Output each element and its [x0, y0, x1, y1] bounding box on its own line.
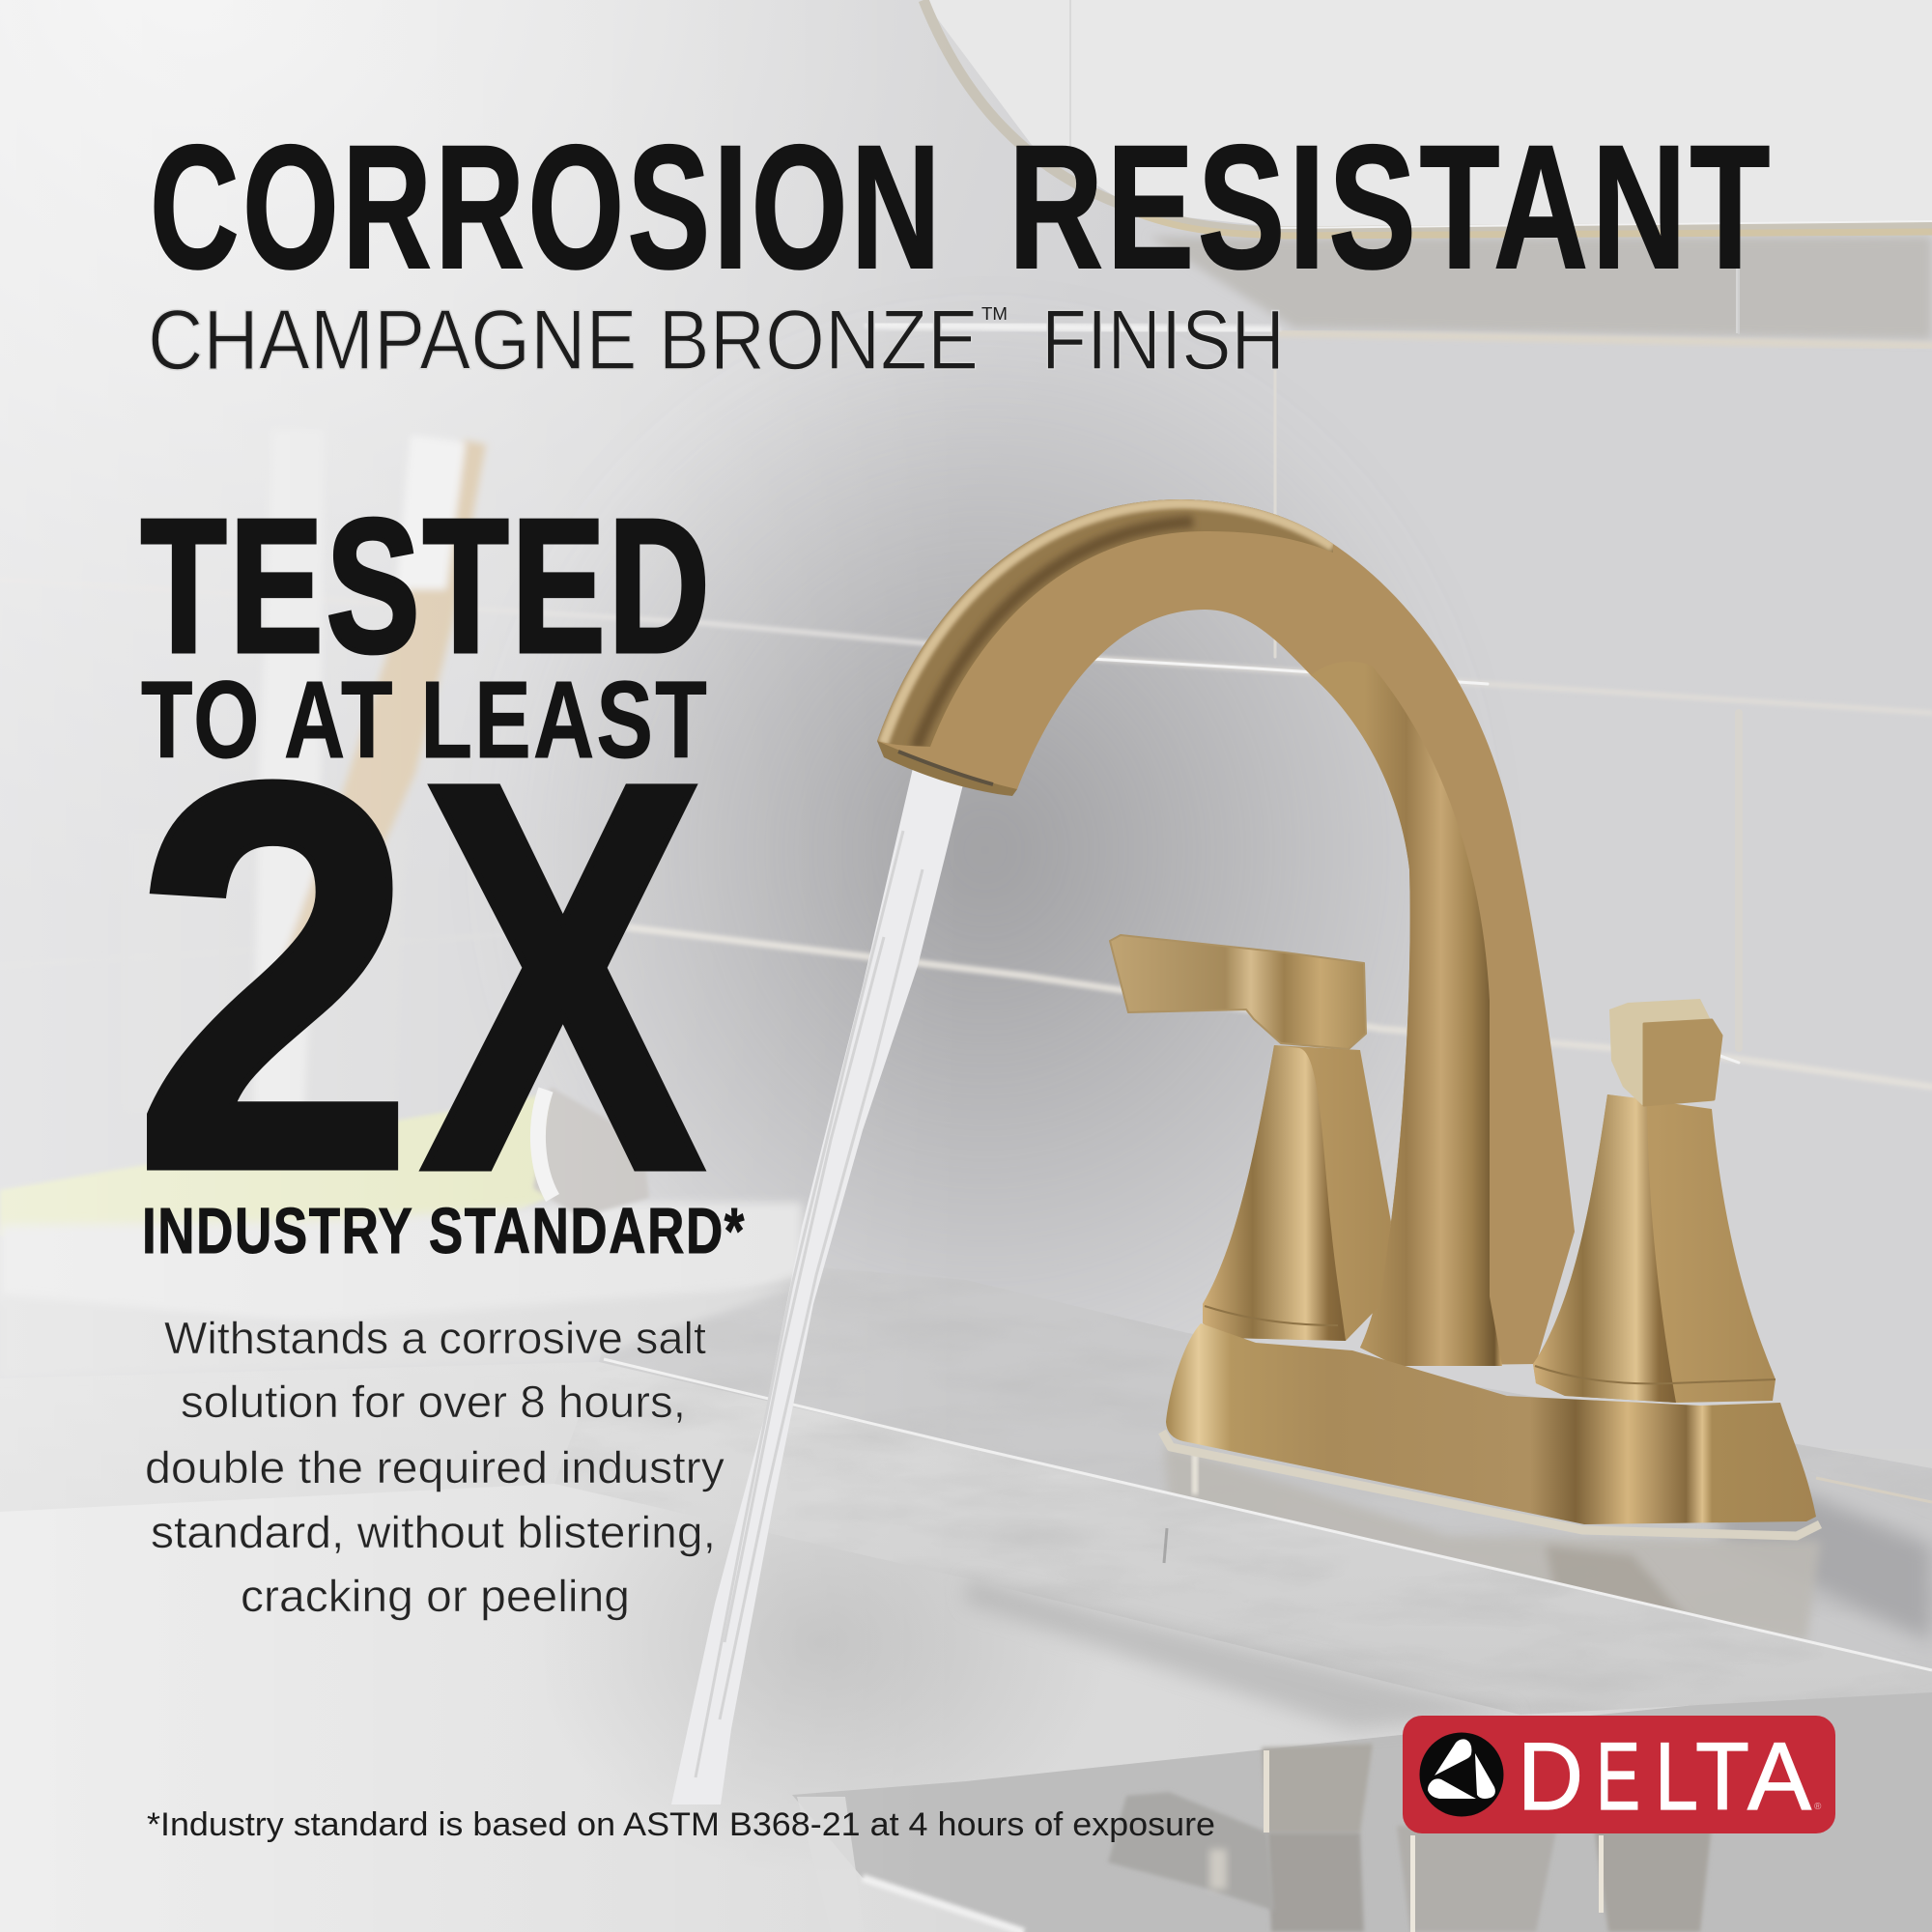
body text — [145, 1313, 724, 1621]
wordmark: L — [1655, 1722, 1698, 1830]
left handle lever — [1110, 935, 1366, 1049]
body text: double the required industry — [145, 1442, 724, 1492]
white wash overlay — [0, 0, 966, 1932]
spout column — [1311, 662, 1502, 1366]
left handle — [1203, 1045, 1391, 1341]
wordmark: T — [1695, 1722, 1749, 1830]
faucet reflection on counter — [1164, 1444, 1821, 1642]
footnote: *Industry standard is based on ASTM B368-21 at 4 hours of exposure — [147, 1806, 1215, 1843]
spout silhouette — [877, 499, 1575, 1366]
subtitle: TM — [981, 304, 1008, 324]
faucet — [869, 493, 1820, 1536]
wordmark: E — [1596, 1722, 1640, 1830]
marble countertop front edge — [0, 1359, 1932, 1729]
title — [150, 108, 1774, 305]
body text: Withstands a corrosive salt — [164, 1313, 706, 1363]
base plate — [1166, 1323, 1816, 1524]
headline: tested to at least 2X industry standard: TESTED — [141, 480, 713, 692]
body text: cracking or peeling — [241, 1571, 630, 1621]
bathroom tray and towel — [0, 1087, 802, 1377]
right handle — [1533, 1094, 1776, 1403]
body text: standard, without blistering, — [151, 1507, 716, 1557]
subtitle: CHAMPAGNE BRONZE — [148, 292, 979, 387]
wordmark: A — [1747, 1722, 1811, 1830]
toothbrushes — [126, 430, 486, 1111]
title: CORROSION — [150, 108, 944, 305]
wordmark — [1518, 1722, 1811, 1830]
headline: tested to at least 2X industry standard — [132, 480, 746, 1284]
body text: solution for over 8 hours, — [181, 1377, 686, 1427]
Delta logo: ® — [1814, 1802, 1822, 1812]
wall tiles — [0, 0, 1932, 1507]
Delta logo — [1403, 1716, 1835, 1833]
headline: tested to at least 2X industry standard: 2 — [132, 668, 415, 1284]
headline: tested to at least 2X industry standard: TO AT LEAST — [141, 659, 709, 781]
water stream — [671, 768, 963, 1932]
sink basin — [0, 1410, 1932, 1932]
spout tip and aerator — [877, 741, 1017, 796]
icon: Delta emblem — [1420, 1733, 1503, 1816]
counter top marble — [599, 1251, 1932, 1676]
spout top rounded band — [869, 493, 1343, 753]
gasket — [1162, 1432, 1820, 1536]
right handle lever — [1609, 999, 1721, 1105]
wordmark: D — [1518, 1722, 1583, 1830]
headline: tested to at least 2X industry standard: INDUSTRY STANDARD* — [142, 1195, 746, 1267]
subtitle: FINISH — [1041, 292, 1285, 387]
headline: tested to at least 2X industry standard: X — [421, 668, 706, 1284]
